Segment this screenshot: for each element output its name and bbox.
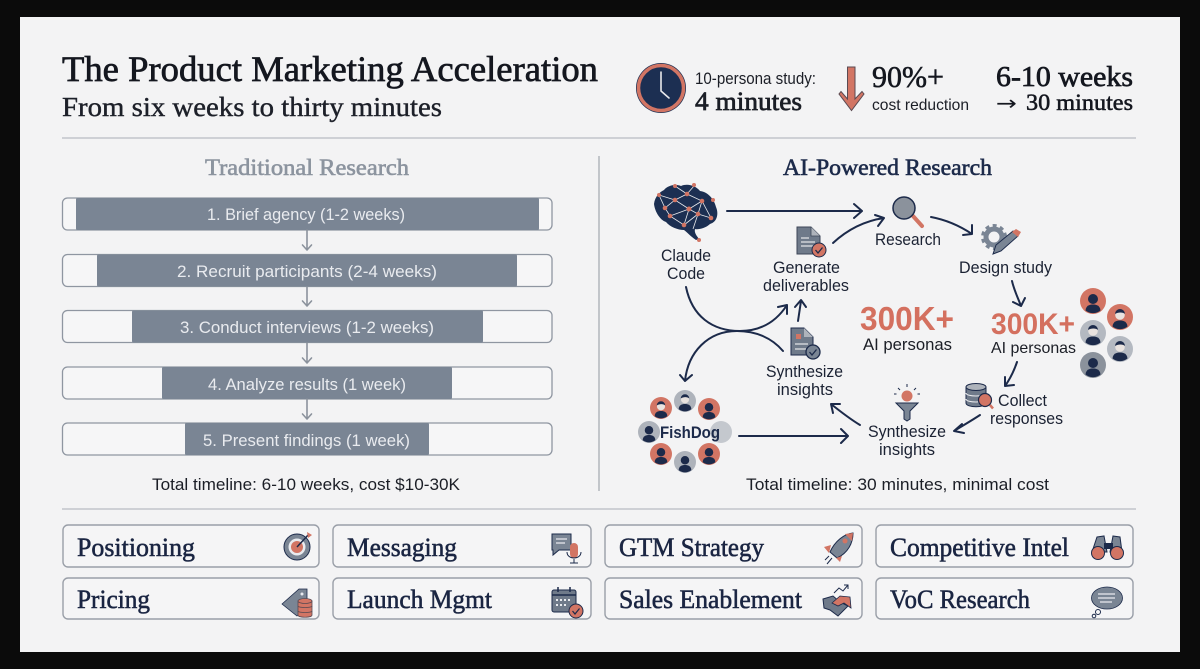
arrow: Claude Code to Research	[727, 204, 862, 218]
step 3	[62, 310, 552, 342]
label: Generate deliverables	[763, 259, 849, 295]
arrow: deliverables to Research	[833, 215, 884, 243]
icon: deliverable document	[797, 227, 826, 257]
stat: 300K+ AI personas, left	[860, 300, 954, 354]
stat: 300K+ AI personas, left: 300K+	[860, 300, 954, 337]
stat: timeline change: 6-10 weeks	[996, 61, 1133, 93]
card: Messaging: Messaging	[347, 533, 457, 562]
label: Synthesize insights, center: Synthesize	[766, 363, 843, 381]
step 3: 3. Conduct interviews (1-2 weeks)	[180, 318, 434, 337]
icon: thought bubble	[1092, 587, 1122, 618]
stat: cost reduction	[839, 59, 969, 114]
icon: funnel with light bulb	[894, 384, 920, 421]
card: VoC Research: VoC Research	[890, 585, 1030, 614]
icon: calendar	[552, 587, 583, 618]
stat: cost reduction: 90%+	[872, 59, 944, 94]
icon: down arrow	[839, 67, 864, 110]
stat: 300K+ AI personas, right: 300K+	[991, 308, 1075, 341]
subtitle: From six weeks to thirty minutes	[62, 92, 442, 122]
label: Claude Code: Claude	[661, 247, 711, 265]
icon: rocket	[824, 533, 853, 564]
arrow	[302, 343, 312, 363]
arrow	[302, 230, 312, 250]
card: VoC Research	[876, 578, 1133, 619]
arrow: Synthesize right to Synthesize center	[831, 404, 860, 425]
icon: brain network	[654, 183, 717, 242]
stat: 4 minutes: 4 minutes	[695, 87, 802, 116]
card: Pricing: Pricing	[77, 585, 150, 614]
stat: timeline change: 30 minutes	[1026, 90, 1133, 116]
arrow: Synthesize to deliverables	[795, 300, 806, 321]
step 1	[62, 198, 552, 230]
card: Launch Mgmt: Launch Mgmt	[347, 585, 493, 614]
card: Positioning: Positioning	[77, 533, 195, 562]
icon: binoculars	[1092, 536, 1124, 560]
arrow: personas to Collect responses	[1005, 362, 1017, 386]
stat: timeline change: →	[996, 91, 1017, 115]
label: Design study: Design study	[959, 259, 1053, 277]
label: Claude Code	[661, 247, 711, 283]
stat: timeline change	[996, 61, 1133, 116]
total timeline traditional: Total timeline: 6-10 weeks, cost $10-30K	[152, 475, 461, 494]
arrow: Collect responses to Synthesize	[954, 415, 980, 433]
card: Messaging	[333, 525, 591, 567]
arrow	[302, 399, 312, 419]
icon: gear and pencil	[982, 226, 1021, 254]
label: Collect responses	[990, 392, 1063, 428]
stat: 300K+ AI personas, right	[991, 308, 1076, 357]
label: Synthesize insights, right	[868, 423, 946, 459]
card: Positioning	[63, 525, 319, 567]
icon: handshake with trend	[823, 585, 851, 616]
persona cluster	[1080, 288, 1133, 378]
step 5	[62, 423, 552, 455]
card: Sales Enablement: Sales Enablement	[619, 585, 803, 614]
label: Synthesize insights, right: insights	[879, 441, 935, 459]
label: Generate deliverables: deliverables	[763, 277, 849, 295]
icon: insights document	[791, 328, 820, 359]
panel: traditional research	[62, 155, 552, 494]
label: Synthesize insights, center: insights	[777, 381, 833, 399]
step 4	[62, 367, 552, 399]
icon: chat and microphone	[552, 534, 581, 563]
card: GTM Strategy: GTM Strategy	[619, 533, 764, 562]
arrow: Synthesize curve to FishDog	[680, 331, 783, 381]
label: Collect responses: Collect	[998, 392, 1047, 410]
label: Synthesize insights, right: Synthesize	[868, 423, 946, 441]
icon: magnifier	[893, 197, 922, 226]
label: Generate deliverables: Generate	[773, 259, 840, 277]
label: Claude Code: Code	[667, 265, 705, 283]
card: GTM Strategy	[605, 525, 862, 567]
label: Research: Research	[875, 231, 941, 249]
card: Pricing	[63, 578, 319, 619]
card: Competitive Intel	[876, 525, 1133, 567]
card: Competitive Intel: Competitive Intel	[890, 533, 1069, 562]
stat: 4 minutes: 10-persona study:	[695, 70, 816, 88]
label: Collect responses: responses	[990, 410, 1063, 428]
step 5: 5. Present findings (1 week)	[203, 431, 410, 450]
persona ring with FishDog label	[638, 390, 732, 473]
arrow: Design study to personas	[1012, 281, 1025, 306]
title: The Product Marketing Acceleration	[62, 49, 598, 89]
label: Synthesize insights, center	[766, 363, 843, 399]
icon: price tag and coins	[282, 589, 312, 617]
icon: database and magnifier	[966, 384, 993, 408]
title block	[62, 49, 598, 122]
card: Sales Enablement	[605, 578, 862, 619]
stat: 300K+ AI personas, right: AI personas	[991, 340, 1076, 357]
arrow: Claude Code curve to deliverables	[686, 287, 787, 331]
step 1: 1. Brief agency (1-2 weeks)	[207, 205, 405, 224]
stat: 4 minutes	[636, 63, 816, 116]
step 2: 2. Recruit participants (2-4 weeks)	[177, 262, 437, 281]
panel: AI-powered research	[638, 155, 1133, 494]
stat: 300K+ AI personas, left: AI personas	[863, 336, 952, 354]
heading: traditional research: Traditional Research	[205, 155, 410, 180]
stat: cost reduction: cost reduction	[872, 97, 969, 114]
arrow: Research to Design study	[931, 217, 972, 235]
icon: clock	[636, 63, 686, 113]
step 2	[62, 254, 552, 286]
card: Launch Mgmt	[333, 578, 591, 619]
arrow: FishDog to Synthesize	[739, 429, 848, 443]
total timeline AI: Total timeline: 30 minutes, minimal cost	[746, 475, 1049, 494]
heading: AI-powered research: AI-Powered Research	[783, 155, 993, 180]
icon: target	[284, 532, 312, 560]
persona ring with FishDog label: FishDog	[660, 423, 720, 442]
step 4: 4. Analyze results (1 week)	[208, 375, 406, 394]
arrow	[302, 287, 312, 306]
